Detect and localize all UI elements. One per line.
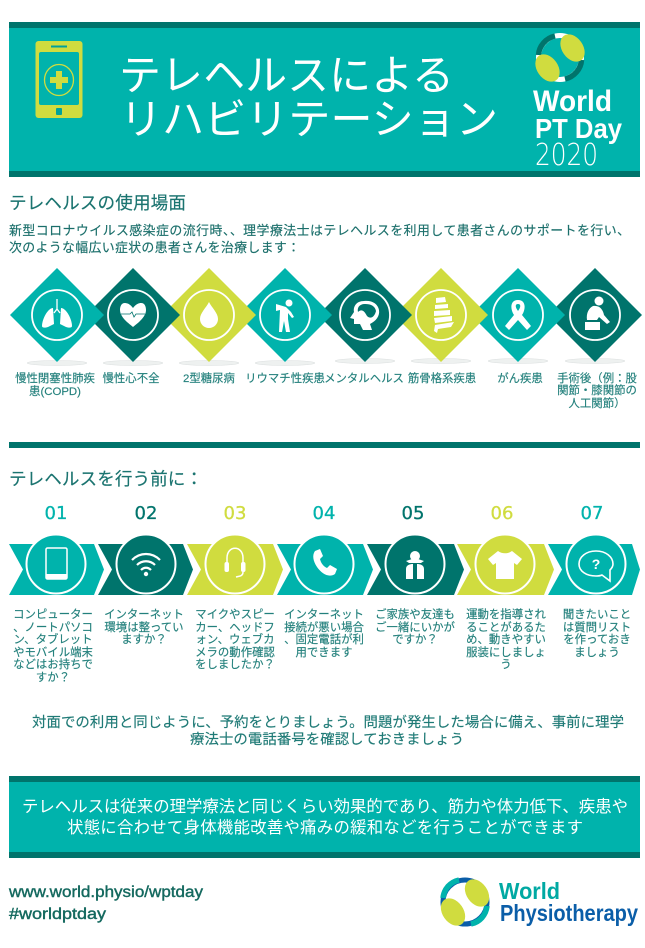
step chevrons <box>9 534 640 595</box>
step texts: ましょう <box>574 646 620 659</box>
step 4: phone <box>277 534 373 595</box>
step texts: 環境は整ってい <box>104 620 184 634</box>
step texts: う <box>500 658 512 671</box>
step texts: を作っておき <box>563 633 631 646</box>
step texts: ン、タブレット <box>13 632 93 646</box>
title: テレヘルスによる <box>119 52 454 99</box>
intro text: 新型コロナウイルス感染症の流行時、、理学療法士はテレヘルスを利用して患者さんのサポートを行い、 <box>9 223 630 238</box>
World PT Day logo: World <box>533 85 612 118</box>
condition labels: メンタルヘルス <box>324 372 404 385</box>
step texts: すか？ <box>36 671 70 684</box>
footer links: #worldptday <box>9 906 106 923</box>
step texts: 運動を指導され <box>466 607 546 621</box>
diamond: post-surgery <box>548 268 642 362</box>
condition labels: 関節・膝関節の <box>557 383 637 397</box>
step numbers: 03 <box>224 503 246 524</box>
World PT Day logo: 2020 <box>535 138 598 173</box>
step numbers: 01 <box>45 503 67 524</box>
diamond: cancer <box>471 268 565 362</box>
step 5: family <box>367 534 464 595</box>
step texts: メラの動作確認 <box>195 645 275 659</box>
step 1: device <box>9 534 104 595</box>
step texts: 聞きたいこと <box>563 608 631 621</box>
step texts: 服装にしましょ <box>466 646 546 659</box>
effectiveness banner: 状態に合わせて身体機能改善や痛みの緩和などを行うことができます <box>67 819 583 837</box>
step texts: ることがあるた <box>466 620 546 634</box>
step texts: カー、ヘッドフ <box>195 621 275 634</box>
World Physiotherapy logo <box>436 875 638 930</box>
step texts: ご家族や友達も <box>375 607 455 621</box>
step texts: ですか？ <box>392 633 438 646</box>
step 2: wifi <box>98 534 193 595</box>
heading: before telehealth: テレヘルスを行う前に： <box>9 469 203 489</box>
effectiveness banner <box>9 776 640 858</box>
step texts: インターネット <box>284 608 364 621</box>
intro text: 次のような幅広い症状の患者さんを治療します： <box>9 240 300 255</box>
condition labels: 人工関節） <box>569 396 625 410</box>
step texts: 用できます <box>296 646 352 659</box>
step texts: は質問リスト <box>563 620 631 634</box>
step texts: ォン、ウェブカ <box>195 632 275 646</box>
footer links <box>8 884 203 923</box>
World Physiotherapy logo: World <box>499 878 560 904</box>
appointment note: 療法士の電話番号を確認しておきましょう <box>190 731 464 748</box>
World PT Day logo: PT Day <box>535 113 622 144</box>
diamond: diabetes <box>162 268 256 362</box>
appointment note <box>32 714 624 748</box>
step texts: ますか？ <box>121 633 167 646</box>
condition labels: 患(COPD) <box>29 385 81 398</box>
step texts: をしましたか？ <box>195 658 275 671</box>
icon: phone with medical cross <box>36 41 82 118</box>
step texts: マイクやスピー <box>195 608 275 621</box>
step texts: インターネット <box>104 608 184 621</box>
step numbers: 07 <box>581 503 603 524</box>
step texts: 、固定電話が利 <box>284 632 364 646</box>
header banner <box>9 22 640 177</box>
step texts: などはお持ちで <box>13 657 93 671</box>
condition labels: 慢性心不全 <box>103 371 159 385</box>
appointment note: 対面での利用と同じように、予約をとりましょう。問題が発生した場合に備え、事前に理学 <box>32 714 624 731</box>
condition labels: 2型糖尿病 <box>183 371 235 385</box>
step texts <box>13 607 631 684</box>
diamond shadows <box>27 358 625 366</box>
step numbers: 02 <box>135 503 157 524</box>
step numbers: 04 <box>313 503 335 524</box>
intro text <box>9 223 630 255</box>
condition labels: がん疾患 <box>497 371 543 385</box>
step texts: 、ノートパソコ <box>13 621 93 634</box>
condition labels: 筋骨格系疾患 <box>408 371 476 385</box>
title <box>119 52 498 143</box>
diamond: rheumatic <box>238 268 332 362</box>
footer links: www.world.physio/wptday <box>8 884 203 901</box>
step 6: t-shirt <box>457 534 554 595</box>
condition labels: 慢性閉塞性肺疾 <box>15 371 95 385</box>
diamond: mental health <box>318 268 412 362</box>
step numbers: 05 <box>402 503 424 524</box>
condition labels <box>15 371 637 410</box>
step numbers: 06 <box>491 503 513 524</box>
step numbers <box>45 503 603 524</box>
step 7: question bubble: ? <box>592 556 600 572</box>
effectiveness banner: テレヘルスは従来の理学療法と同じくらい効果的であり、筋力や体力低下、疾患や <box>22 798 628 816</box>
condition labels: 手術後（例：股 <box>557 371 637 385</box>
step texts: 接続が悪い場合 <box>284 620 364 634</box>
diamond: heart failure <box>86 268 180 362</box>
diamond: musculoskeletal <box>394 268 488 362</box>
diamond: COPD <box>10 268 104 362</box>
heading: usage scenes: テレヘルスの使用場面 <box>9 193 186 213</box>
condition labels: リウマチ性疾患 <box>245 371 325 385</box>
condition diamonds <box>10 268 642 366</box>
step 3: headset <box>187 534 283 595</box>
title: リハビリテーション <box>120 96 498 143</box>
step texts: やモバイル端末 <box>13 645 93 659</box>
World PT Day logo <box>530 30 622 173</box>
step texts: ご一緒にいかが <box>375 620 455 634</box>
step texts: コンピューター <box>13 608 93 621</box>
step texts: め、動きやすい <box>466 632 546 646</box>
step 7: question bubble <box>548 534 640 595</box>
